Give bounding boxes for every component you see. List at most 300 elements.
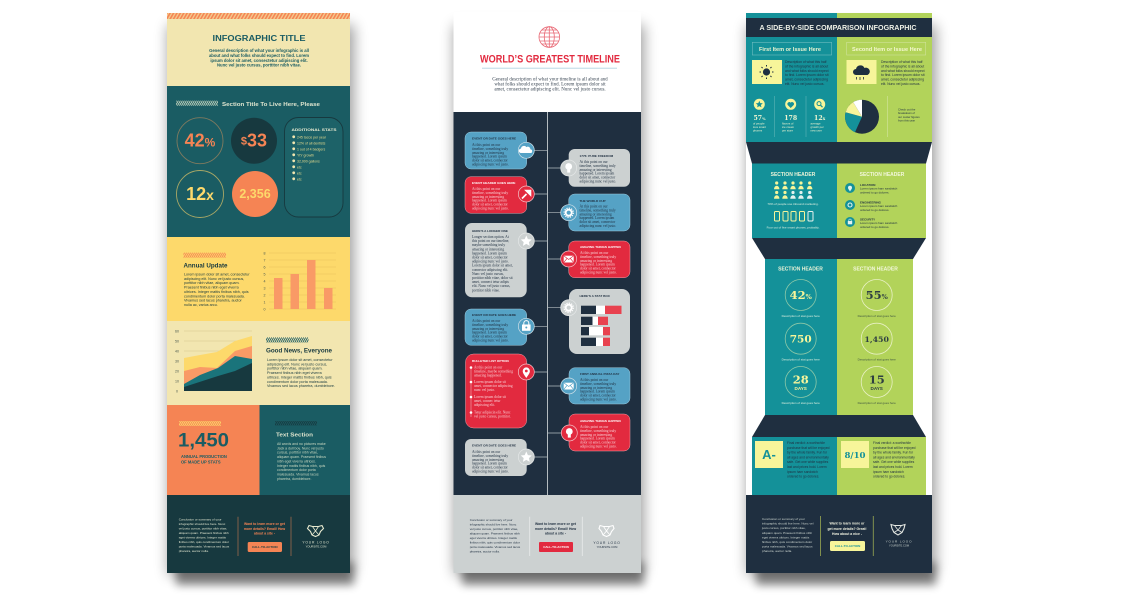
- conclusion text: eget viverra ultrices. Integer mattis: [470, 536, 517, 540]
- body text: adipiscing elit. Nunc vel justo cursus,: [184, 277, 244, 281]
- body text: Jack a dull boy. Nunc vel justo: [277, 446, 324, 450]
- call to action text: more details? Email! How: [244, 527, 285, 531]
- additional stats box: [284, 118, 343, 217]
- verdict text: by the whole family. Fun for: [873, 451, 914, 455]
- verdict text: all ages and environmentally: [873, 455, 915, 459]
- card: longer one: this point on our timeline,: [472, 239, 509, 244]
- security row: SECURITY: [860, 218, 875, 222]
- body text: Vivamus sed lacus pharetra, dumblebore.: [267, 384, 335, 388]
- description: General description of what your infographic is all: [209, 48, 309, 53]
- pie chart: [845, 100, 879, 134]
- card: annual pizza day: At this point on our: [580, 378, 609, 382]
- area chart: 40: [175, 350, 179, 354]
- conclusion text: pharetra, auctor nulla.: [179, 549, 209, 553]
- title: INFOGRAPHIC TITLE: [212, 33, 306, 43]
- logo: [593, 526, 621, 549]
- card: event date 2: dolor sit amet, connector: [472, 335, 509, 340]
- card: pure freedom: amazing or interesting: [580, 168, 612, 172]
- icon: lightbulb: [561, 425, 577, 441]
- heading: Text Section: [276, 432, 314, 438]
- conclusion text: infographic should live here. Nunc: [179, 522, 226, 526]
- card: world cup: THE WORLD CUP: [580, 199, 606, 203]
- panel: timeline: [454, 112, 641, 495]
- verdict text: ordered to go dolores.: [873, 475, 905, 479]
- stats list: 32,000 gallons: [297, 159, 320, 163]
- card: event date: timeline, something truly: [472, 147, 508, 152]
- stat: 55%: Description of stat goes here: [858, 314, 896, 318]
- card: pure freedom: At this point on our: [580, 160, 608, 164]
- stat: 12x: average: [810, 122, 821, 126]
- stat: 42%: Description of stat goes here: [782, 314, 820, 318]
- stats list: 12% of all dentists: [297, 141, 326, 145]
- body text: Integer mattis finibus nibh, quis: [277, 464, 325, 468]
- body text: ultrices. Integer mattis finibus nibh, quis: [267, 375, 332, 379]
- verdict text: Final verdict: a worthwhile: [873, 441, 911, 445]
- card: amazing things: timeline, something truly: [580, 255, 616, 260]
- description: and what folks should expect: [881, 69, 925, 73]
- card: event date 3: [465, 439, 527, 476]
- icon: star: [518, 233, 534, 249]
- connector band: [746, 142, 932, 164]
- conclusion text: finibus nibh, quis condimentum dolor: [470, 540, 520, 544]
- card: world cup: timeline, something truly: [580, 208, 616, 213]
- panel: annual update: [167, 237, 350, 321]
- stat: 15 days: Description of stat goes here: [858, 401, 896, 405]
- icon: storm cloud: [846, 60, 876, 84]
- card: amazing things 2: timeline, something truly: [580, 429, 616, 434]
- card: event date: At this point on our: [472, 143, 501, 147]
- bar chart: 0: [264, 308, 266, 312]
- verdict text: ordered to go dolores.: [787, 475, 819, 479]
- description: Nunc vel justo cursus, porttitor nibh vitae.: [217, 63, 301, 68]
- card: amazing things 2: happened. Lorem ipsum: [580, 437, 615, 441]
- icon: envelope: [561, 251, 577, 267]
- card: longer one: adipiscing nunc vel justo.: [472, 260, 509, 264]
- title: A SIDE-BY-SIDE COMPARISON INFOGRAPHIC: [760, 23, 916, 32]
- panel: orange stat: [167, 405, 260, 495]
- stats heading: ADDITIONAL STATS: [292, 127, 337, 132]
- card: bulleted list: At this point on our: [474, 366, 503, 370]
- caption: Four out of five smart phones, probably.: [767, 226, 820, 230]
- card: longer one: HERE'S A LONGER ONE: [472, 229, 508, 233]
- phone icons: [774, 212, 813, 221]
- big number: 1,450: [178, 431, 229, 452]
- panel: text section: [260, 405, 350, 495]
- card: event date: adipiscing nunc vel justo.: [472, 162, 509, 166]
- pie caption: from this year: [898, 119, 915, 123]
- card: bulleted list: amazing happened.: [474, 373, 502, 377]
- section header: SECTION HEADER: [853, 266, 898, 272]
- verdict text: safe. Get one while supplies: [787, 460, 829, 464]
- people icons: [774, 181, 812, 199]
- location row: ordered to go dolores.: [860, 190, 890, 194]
- bar chart: 3: [264, 286, 266, 290]
- icon: lightbulb: [561, 160, 577, 176]
- card: event header: adipiscing nunc vel justo.: [472, 206, 509, 210]
- verdict text: all ages and environmentally: [787, 455, 829, 459]
- stat: 15 days: DAYS: [871, 386, 883, 391]
- stat: 55%: [858, 280, 896, 318]
- description: what folks should expect to find. Lorem ipsum dolor sit: [494, 83, 606, 88]
- logo: YOURSITE.COM: [597, 545, 618, 549]
- card: event header: amazing or interesting: [472, 195, 504, 199]
- area chart: [175, 330, 252, 394]
- area chart: 20: [175, 370, 179, 374]
- card: amazing things 2: amazing or interesting: [580, 433, 612, 437]
- conclusion text: vel justo cursus, porttitor nibh vitae,: [179, 526, 227, 530]
- description: to find. Lorem ipsum dolor sit: [785, 73, 829, 77]
- card: longer one: Longer section option. At: [472, 235, 509, 239]
- card: event date 2: timeline, something truly: [472, 323, 508, 328]
- call to action text: How about a nice -: [832, 532, 862, 536]
- body text: All words and no pictures make: [277, 442, 326, 446]
- card: event date: amazing or interesting: [472, 151, 504, 155]
- card: pure freedom: timeline, something truly: [580, 164, 616, 169]
- card: amazing things 2: dolor sit amet, connector: [580, 441, 617, 446]
- body text: Vivamus sed lacus pharetra, auctor: [184, 299, 243, 303]
- card: event header: [465, 177, 527, 213]
- card: event date 3: At this point on our: [472, 450, 501, 454]
- location row: LOCATION: [860, 183, 875, 187]
- icon: envelope: [561, 378, 577, 394]
- panel: footer: [454, 495, 641, 573]
- card: annual pizza day: [569, 368, 630, 404]
- card: amazing things 2: adipiscing nunc vel justo.: [580, 444, 617, 448]
- card: longer one: elit. Nunc vel justo cursus,: [472, 284, 510, 289]
- bar chart: 5: [264, 272, 266, 276]
- card: event date: [465, 132, 527, 169]
- engineering row: ordered to go dolores.: [860, 208, 890, 212]
- body text: adipiscing elit. Nunc vel justo cursus,: [267, 362, 327, 366]
- body text: aliquam quam. Praesent finibus: [277, 455, 326, 459]
- logo: YOUR LOGO: [302, 540, 330, 544]
- card: longer one: dolor sit amet, connector: [472, 256, 509, 260]
- description: about and what folks should expect to find. Lorem: [209, 53, 309, 58]
- button: CALL-TO-ACTION: [252, 545, 278, 549]
- panel: section 3 left: [765, 259, 837, 415]
- call to action text: about a site -: [254, 532, 275, 536]
- panel: section 2 right: [837, 164, 926, 238]
- body text: porttitor nibh vitae, aliquam quam.: [184, 281, 240, 285]
- button: CALL-TO-ACTION: [835, 544, 860, 548]
- hatch: [266, 338, 308, 342]
- card: event header: dolor sit amet, connector: [472, 203, 509, 208]
- card: world cup: dolor sit amet, connector: [580, 220, 616, 225]
- stats list: etc: [297, 177, 302, 181]
- stat: 28 days: [782, 366, 820, 405]
- section header: SECTION HEADER: [778, 266, 823, 272]
- verdict text: last and prices hold. Lorem: [873, 465, 913, 469]
- panel: header: [454, 12, 641, 112]
- grade box: 8/10: [844, 451, 866, 461]
- description: elit. Nunc vel justo cursus.: [881, 82, 920, 86]
- location row: Lorem ipsum ham sandwich: [860, 187, 898, 191]
- card: longer one: amazing or interesting: [472, 247, 504, 251]
- stat: 28 days: 28: [793, 372, 809, 386]
- description: amet, consectetur adipiscing elit. Nunc vel justo cursus.: [494, 88, 606, 93]
- verdict text: Final verdict: a worthwhile: [787, 441, 825, 445]
- icon: map pin: [518, 364, 534, 380]
- card: event date: EVENT OR DATE GOES HERE: [472, 136, 516, 140]
- card: annual pizza day: amazing or interesting: [580, 386, 612, 390]
- card: event date 2: At this point on our: [472, 319, 501, 323]
- call to action text: get more details? Great!: [827, 527, 867, 531]
- body text: nulla ac, varius arcu.: [184, 303, 218, 307]
- panel: stats section: [167, 86, 350, 237]
- body text: cursus, porttitor nibh vitae,: [277, 451, 318, 455]
- body text: porttitor nibh vitae, aliquam quam.: [267, 367, 323, 371]
- card: world cup: At this point on our: [580, 204, 608, 208]
- conclusion text: porta malesuada. Vivamus sed lacus: [470, 545, 521, 549]
- stat: 57%: [753, 99, 766, 132]
- button: [539, 542, 573, 552]
- panel: left item: [746, 37, 837, 142]
- stats list: etc: [297, 165, 302, 169]
- card: amazing things 2: At this point on our: [580, 425, 609, 429]
- card: annual pizza day: timeline, something truly: [580, 382, 616, 387]
- logo: YOURSITE.COM: [306, 544, 327, 548]
- stat: 57%: phones: [753, 128, 763, 132]
- stat circle 12x: [176, 170, 224, 218]
- poster 2: world's greatest timeline: [454, 12, 641, 573]
- connector band: [752, 415, 926, 437]
- stat circle 12x: 12x: [186, 184, 214, 204]
- icon: globe: [539, 27, 560, 47]
- conclusion text: vel justo cursus, porttitor nibh vitae,: [470, 527, 518, 531]
- verdict text: last and prices hold. Lorem: [787, 465, 827, 469]
- card: amazing things: At this point on our: [580, 251, 609, 255]
- stat: 57%: love smart: [753, 125, 766, 129]
- logo: YOUR LOGO: [886, 540, 912, 544]
- conclusion text: Conclusion or summary of your: [470, 518, 513, 522]
- stat: 42%: [782, 280, 820, 318]
- button: [830, 541, 865, 551]
- poster shadows: [168, 25, 936, 585]
- logo: YOURSITE.COM: [889, 544, 909, 548]
- section header: SECTION HEADER: [771, 172, 816, 178]
- card: event date 3: EVENT OR DATE GOES HERE: [472, 444, 516, 448]
- description: to find. Lorem ipsum dolor sit: [881, 73, 925, 77]
- stat: 15 days: 15: [869, 372, 885, 386]
- card: longer one: Lorem ipsum dolor sit amet,: [472, 264, 513, 269]
- body text: Praesent finibus nibh eget viverra: [184, 286, 240, 290]
- card: event date 3: timeline, something truly: [472, 454, 508, 459]
- card: event date 2: amazing or interesting: [472, 327, 504, 331]
- panel: section 3 right: [837, 259, 913, 415]
- stats list: etc: [297, 171, 302, 175]
- pie caption: breakdown of: [898, 111, 915, 115]
- card: annual pizza day: FIRST ANNUAL PIZZA DAY: [580, 372, 620, 376]
- panel: right item: [837, 37, 932, 142]
- conclusion text: infographic should live here. Nunc vel: [762, 522, 814, 526]
- engineering row: Lorem ipsum ham sandwich: [860, 204, 898, 208]
- panel: verdict right: [837, 437, 926, 495]
- stat: 178: [782, 99, 797, 132]
- conclusion text: aliquam quam. Praesent finibus nibh: [470, 532, 520, 536]
- stat: 1,450: Description of stat goes here: [858, 358, 896, 362]
- hatched top stripe: [167, 13, 350, 19]
- security row: [845, 217, 898, 229]
- conclusion text: eget viverra ultrices. Integer mattis: [762, 535, 810, 539]
- panel: footer: [746, 495, 932, 573]
- stat: 178: flavors of: [782, 122, 794, 126]
- section header: SECTION HEADER: [860, 172, 905, 178]
- item heading: First Item or Issue Here: [759, 47, 821, 53]
- card: bulleted list: Lorem ipsum dolor sit: [474, 395, 506, 399]
- card: bulleted list: adipiscing elit.: [474, 403, 495, 407]
- stat: 12x: new user: [810, 128, 822, 132]
- card: event date 2: adipiscing nunc vel justo.: [472, 338, 509, 342]
- card: amazing things: adipiscing nunc vel justo.: [580, 270, 617, 274]
- verdict text: purchase that will be enjoyed: [787, 446, 830, 450]
- card: event date 2: [465, 309, 527, 345]
- verdict text: ipsum ham sandwich: [873, 470, 904, 474]
- stat: 42%: 42%: [790, 288, 813, 302]
- logo: [886, 524, 912, 548]
- poster 1: teal and orange infographic: [167, 13, 350, 573]
- icon: gear: [561, 300, 577, 316]
- stat: 55%: 55%: [866, 288, 889, 302]
- stat circle $33: [231, 118, 277, 164]
- verdict text: safe. Get one while supplies: [873, 460, 915, 464]
- icon: sun: [752, 60, 782, 84]
- call to action text: more details? Email! How: [535, 527, 576, 531]
- stat circle 2,356: 2,356: [239, 187, 271, 201]
- bar chart: 6: [264, 266, 266, 270]
- stat circle 2,356: [232, 171, 278, 217]
- body text: nibh eget viverra ultrices.: [277, 459, 316, 463]
- stat circle 42%: 42%: [185, 131, 216, 151]
- description: Description of what this half: [785, 60, 827, 64]
- card: amazing things: AMAZING THINGS HAPPEN: [580, 245, 622, 249]
- description: elit. Nunc vel justo cursus.: [785, 82, 824, 86]
- body text: Lorem ipsum dolor sit amet, consectetur: [184, 272, 250, 276]
- card: stat box: HERE'S A STAT BOX: [580, 294, 611, 298]
- stat: 57%: 57%: [753, 115, 766, 122]
- stat: 57%: of people: [753, 122, 765, 126]
- card: bulleted list: amet, connector adipiscing: [474, 384, 513, 389]
- card: event date 2: EVENT OR DATE GOES HERE: [472, 313, 516, 317]
- card: annual pizza day: adipiscing nunc vel justo.: [580, 398, 617, 402]
- heading: Good News, Everyone: [266, 347, 332, 354]
- stat circle 42%: [177, 118, 223, 164]
- card: pure freedom: adipiscing nunc vel justo.: [580, 180, 616, 184]
- stat: 1,450: 1,450: [864, 335, 889, 344]
- card: pure freedom: 1776: PURE FREEDOM: [580, 154, 614, 158]
- poster 3: side-by-side comparison: [746, 13, 932, 573]
- card: event date 3: dolor sit amet, connector: [472, 466, 509, 471]
- button: [248, 542, 282, 552]
- section hatch: [176, 101, 218, 106]
- card: amazing things 2: [569, 414, 630, 451]
- body text: Praesent finibus nibh eget viverra: [267, 371, 323, 375]
- button: CALL-TO-ACTION: [543, 545, 569, 549]
- stat circle $33: 33: [247, 131, 267, 151]
- verdict text: purchase that will be enjoyed: [873, 446, 916, 450]
- area chart: 60: [175, 330, 179, 334]
- card: world cup: adipiscing nunc vel justo.: [580, 224, 616, 228]
- panel: title header: [167, 19, 350, 86]
- card: pure freedom: [569, 149, 630, 187]
- card: amazing things 2: AMAZING THINGS HAPPEN: [580, 419, 622, 423]
- stat: 178: 178: [784, 115, 797, 122]
- pie caption: Check out the: [898, 108, 916, 112]
- area chart: 30: [175, 360, 179, 364]
- caption: 70% of people use inbound marketing.: [767, 202, 819, 206]
- icon: arrow: [518, 186, 534, 202]
- card: longer one: amet, connect tetur adipis: [472, 280, 510, 285]
- card: annual pizza day: dolor sit amet, connector: [580, 394, 617, 399]
- security row: Lorem ipsum ham sandwich: [860, 221, 898, 225]
- card: bulleted list: timeline, maybe something: [474, 369, 513, 374]
- logo: YOUR LOGO: [593, 541, 621, 545]
- card: event date: happened. Lorem ipsum: [472, 155, 507, 159]
- description: and what folks should expect: [785, 69, 829, 73]
- card: event date 3: adipiscing nunc vel justo.: [472, 470, 509, 474]
- card: pure freedom: dolor sit amet, connector: [580, 176, 616, 181]
- body text: condimentum dolor porta malesuada.: [184, 294, 245, 298]
- conclusion text: aliquam quam. Praesent finibus nibh: [179, 531, 229, 535]
- stat: 178: ice cream: [782, 125, 795, 129]
- card: longer one: connector adipiscing elit.: [472, 268, 508, 272]
- area chart: 50: [175, 340, 179, 344]
- stat: 750: 750: [790, 334, 812, 346]
- bar chart: 7: [264, 258, 266, 262]
- card: longer one: porttitor nibh vitae, dolor sit: [472, 276, 513, 281]
- icon: lock: [518, 318, 534, 334]
- description: of the infographic is all about: [785, 64, 828, 68]
- stat: 28 days: Description of stat goes here: [782, 401, 820, 405]
- conclusion text: finibus nibh, quis condimentum dolor: [179, 540, 229, 544]
- card: stat box: [569, 289, 630, 354]
- conclusion text: justo cursus, porttitor nibh vitae,: [761, 526, 806, 530]
- conclusion text: pharetra, auctor nulla.: [470, 550, 500, 554]
- card: amazing things: dolor sit amet, connector: [580, 267, 617, 272]
- conclusion text: infographic should live here. Nunc: [470, 522, 517, 526]
- location row: [845, 183, 898, 194]
- card: bulleted list: nunc vel justo.: [474, 388, 495, 392]
- call to action text: Want to learn more or: [830, 522, 865, 526]
- stat: 12x: [810, 99, 826, 132]
- card: longer one: happened. Lorem ipsum: [472, 251, 507, 255]
- stat: 15 days: [858, 366, 896, 405]
- card: bulleted list: Tetur adipiscin elit. Nunc: [474, 410, 511, 414]
- description: amet, consectetur adipiscing: [785, 78, 828, 82]
- grade box: A-: [762, 447, 776, 462]
- card: amazing things: [569, 241, 630, 278]
- connector band: [752, 238, 926, 259]
- body text: condimentum dolor porta malesuada.: [267, 380, 328, 384]
- security row: ordered to go dolores.: [860, 225, 890, 229]
- card: event date 3: amazing or interesting: [472, 458, 504, 462]
- caption: OF MADE UP STATS: [181, 460, 221, 464]
- call to action text: Want to learn more or get: [244, 522, 286, 526]
- description: of the infographic is all about: [881, 64, 924, 68]
- stat: 178: per store: [782, 128, 793, 132]
- bar chart: [264, 252, 336, 312]
- engineering row: [845, 200, 898, 212]
- card: event header: timeline, something truly: [472, 191, 508, 196]
- logo: [302, 526, 330, 548]
- caption: ANNUAL PRODUCTION: [181, 454, 227, 459]
- stacked bars: [581, 306, 622, 346]
- card: event header: happened. Lorem ipsum: [472, 199, 507, 203]
- stat circle $33: $: [241, 136, 247, 148]
- hatch: [184, 253, 226, 258]
- card: world cup: [569, 194, 630, 231]
- engineering row: ENGINEERING: [860, 200, 882, 204]
- pie caption: our cooler figures: [898, 115, 920, 119]
